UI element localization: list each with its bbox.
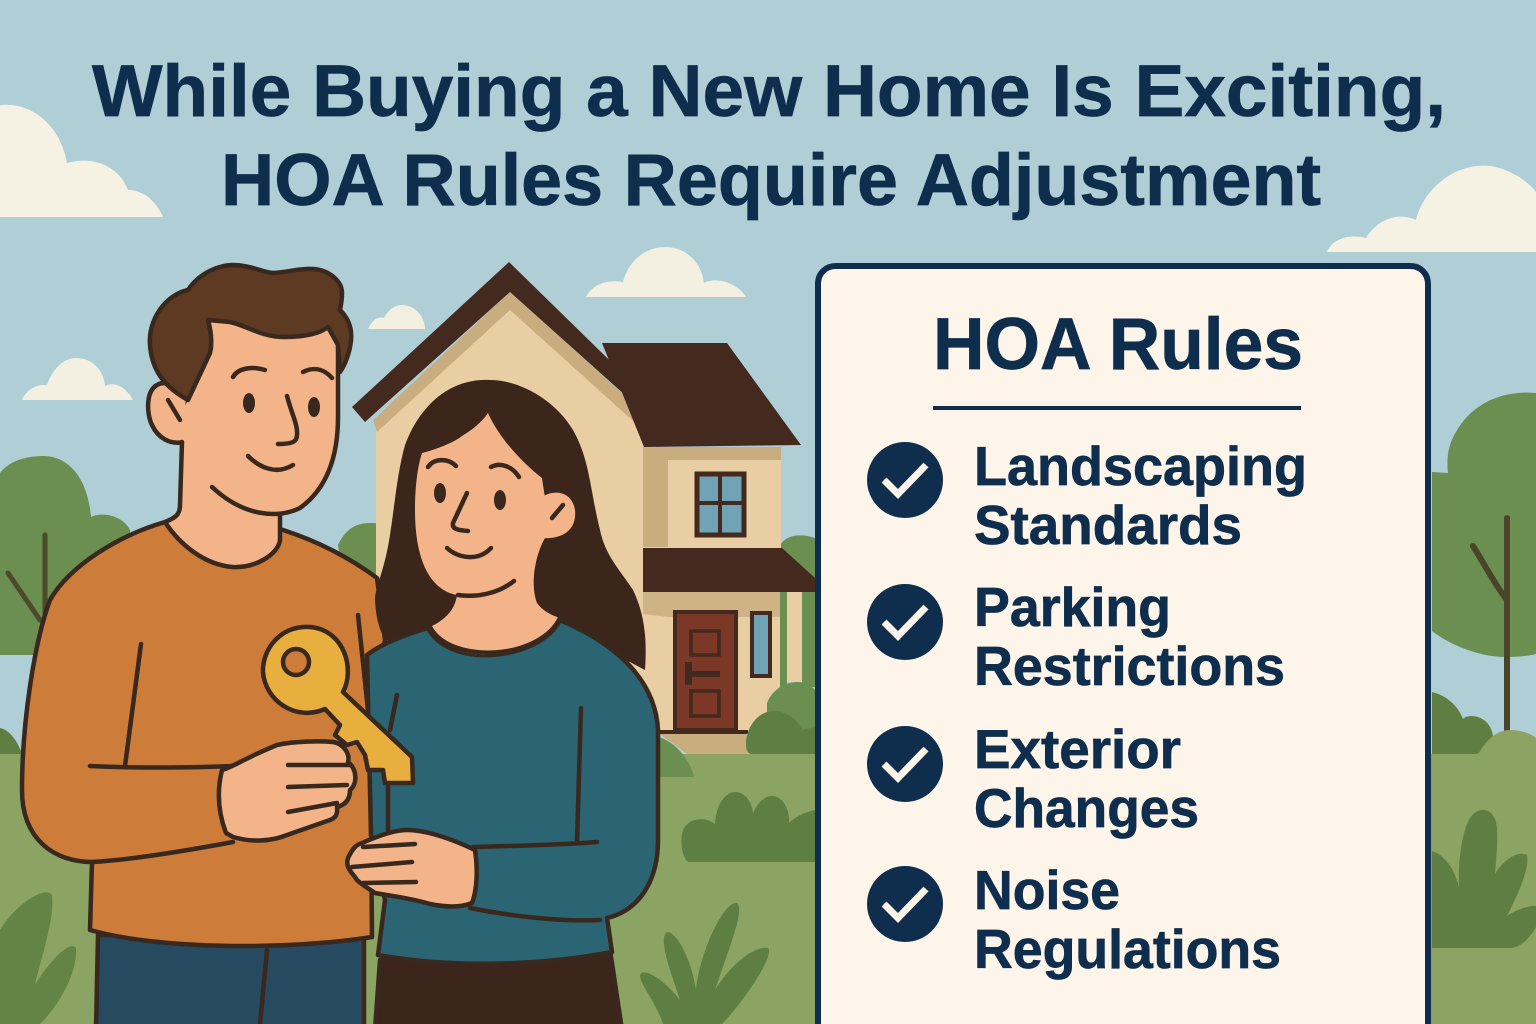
man hand [219, 741, 355, 841]
cloud: small [368, 305, 425, 329]
cloud: left [22, 358, 133, 400]
panel: HOA rules [818, 266, 1428, 1024]
porch posts [780, 592, 815, 687]
house roof: right [602, 343, 801, 447]
small tree behind couple [338, 523, 395, 620]
man ear line [168, 400, 180, 420]
panel heading: HOA Rules [933, 304, 1303, 385]
woman collar and jaw [430, 581, 560, 653]
wing wall shadow [643, 447, 781, 547]
lawn plant [640, 903, 769, 1024]
house roof: main gable [352, 262, 645, 422]
left tree [0, 456, 130, 655]
woman hair back [375, 380, 646, 670]
man face outline [165, 340, 338, 567]
house gable shading [373, 292, 644, 432]
man face and neck [165, 320, 338, 567]
right dark bush [1432, 692, 1493, 754]
porch roof [643, 548, 815, 592]
woman ear [540, 493, 575, 538]
item: parking restrictions [867, 576, 1285, 697]
cloud: upper right [1327, 166, 1536, 252]
man sweater [22, 522, 385, 946]
label: Noise [974, 859, 1120, 921]
label: Standards [974, 494, 1242, 556]
label: Landscaping [974, 435, 1307, 497]
right hill [1477, 730, 1536, 756]
house door [675, 612, 736, 730]
man brows nose mouth [233, 368, 332, 470]
left hedge [0, 728, 22, 754]
check icon [867, 866, 943, 942]
bush beside woman [655, 736, 694, 777]
right plant [1432, 810, 1536, 948]
woman brows nose mouth [428, 460, 563, 557]
door side window [752, 613, 770, 676]
label: Exterior [974, 718, 1181, 780]
house [352, 262, 815, 754]
tree behind porch [780, 535, 815, 600]
check icon [867, 726, 943, 802]
title [92, 51, 1446, 221]
door sill and step [655, 730, 748, 734]
house wall: right wing [640, 447, 781, 730]
woman hand [347, 830, 477, 906]
cloud: center [586, 247, 746, 297]
woman sweater [367, 620, 658, 964]
label: Regulations [974, 918, 1281, 980]
man trousers [96, 935, 364, 1024]
woman face and neck [415, 413, 560, 655]
man eyes [243, 393, 320, 417]
man ear [148, 383, 188, 443]
check icon [867, 442, 943, 518]
house wall: main gable [376, 300, 643, 735]
man hair [150, 265, 351, 400]
item: landscaping standards [867, 435, 1307, 556]
foreground bushes [0, 682, 1536, 1024]
woman eyes [434, 483, 506, 510]
porch bush dark [746, 711, 815, 754]
divider [933, 406, 1301, 410]
left plant [0, 892, 76, 1024]
right tree [1432, 393, 1536, 730]
key [263, 627, 413, 783]
woman skirt [375, 950, 622, 1024]
man [22, 265, 385, 1024]
title line 2: HOA Rules Require Adjustment [221, 140, 1321, 221]
check icon [867, 584, 943, 660]
porch ceiling shadow [643, 592, 782, 617]
title line 1: While Buying a New Home Is Exciting, [92, 51, 1446, 132]
house window [697, 474, 744, 535]
item: noise regulations [867, 859, 1281, 980]
porch bush light [767, 682, 815, 754]
label: Restrictions [974, 635, 1285, 697]
label: Parking [974, 576, 1171, 638]
item: exterior changes [867, 718, 1199, 839]
lawn shrub [681, 792, 815, 862]
ground [0, 754, 1536, 1024]
label: Changes [974, 777, 1199, 839]
woman [367, 380, 658, 1024]
cloud: upper left [0, 105, 163, 217]
panel card [818, 266, 1428, 1024]
